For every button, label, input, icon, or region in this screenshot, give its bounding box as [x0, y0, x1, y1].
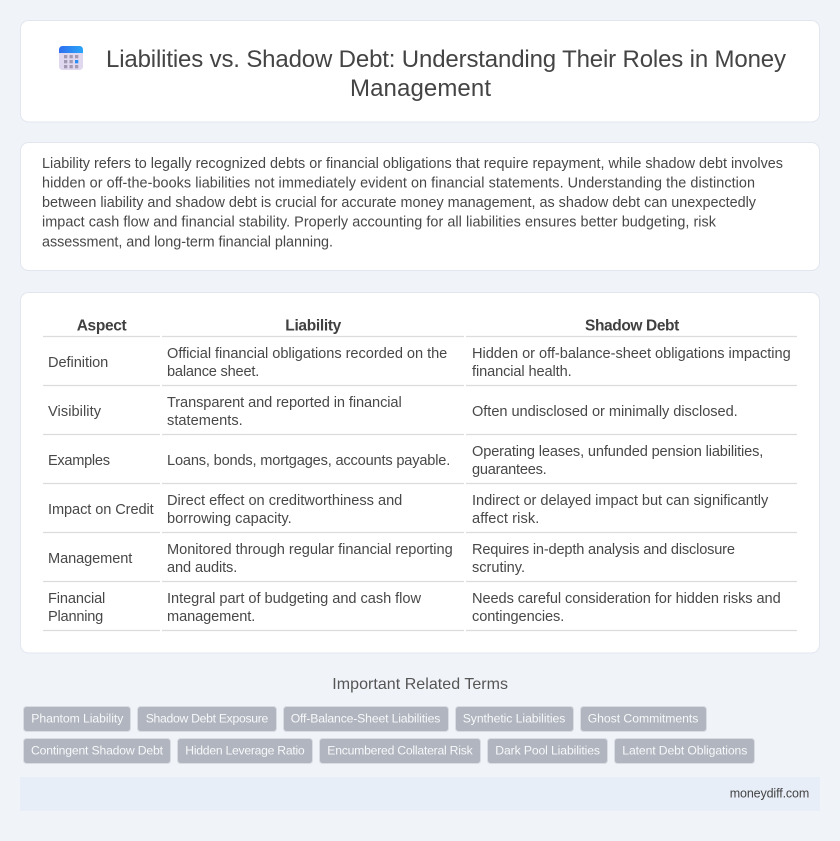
table header: Aspect [77, 318, 127, 334]
title: Liabilities vs. Shadow Debt: Understanding Their Roles in Money [106, 46, 786, 73]
tag: Hidden Leverage Ratio [185, 744, 305, 758]
tag: Off-Balance-Sheet Liabilities [291, 712, 440, 726]
row: management: Management [48, 551, 132, 567]
row: financial planning: Planning [48, 609, 103, 625]
row: management: Requires in-depth analysis and disclosure [472, 542, 735, 558]
tag [614, 738, 754, 764]
tag [24, 738, 170, 764]
row: definition: Official financial obligations recorded on the [167, 346, 447, 362]
tag: Latent Debt Obligations [622, 744, 747, 758]
tag [320, 738, 480, 764]
row: definition [48, 346, 791, 380]
row: visibility: Often undisclosed or minimally disclosed. [472, 404, 738, 420]
text block: summary [42, 156, 783, 250]
panel: header [20, 20, 820, 122]
row: impact on credit: borrowing capacity. [167, 511, 292, 527]
row: management: and audits. [167, 560, 237, 576]
tag [456, 706, 574, 732]
row: financial planning: contingencies. [472, 609, 564, 625]
tag [178, 738, 312, 764]
text block: summary: Liability refers to legally recognized debts or financial obligations that require repayment, while shadow debt involves [42, 156, 783, 172]
row: visibility [48, 395, 738, 429]
row: impact on credit: affect risk. [472, 511, 539, 527]
row: visibility: Transparent and reported in financial [167, 395, 402, 411]
row: management: scrutiny. [472, 560, 525, 576]
row: definition: Definition [48, 355, 108, 371]
icon: calendar [59, 46, 83, 70]
tag [580, 706, 706, 732]
title [106, 46, 786, 102]
panel: comparison table [20, 292, 820, 653]
footer [20, 777, 820, 811]
text block: summary: between liability and shadow debt is crucial for accurate money management, as shadow debt can unexpectedly [42, 195, 757, 211]
tag: Encumbered Collateral Risk [327, 744, 474, 758]
row: financial planning: management. [167, 609, 255, 625]
tag [24, 706, 130, 732]
row: visibility: Visibility [48, 404, 102, 420]
row: examples [48, 444, 763, 478]
table header [77, 318, 679, 334]
row: financial planning: Integral part of budgeting and cash flow [167, 591, 421, 607]
row: definition: balance sheet. [167, 364, 259, 380]
tag [138, 706, 276, 732]
tag: Contingent Shadow Debt [31, 744, 164, 758]
row: visibility: statements. [167, 413, 243, 429]
row: financial planning [48, 591, 781, 625]
tag [488, 738, 608, 764]
row: impact on credit: Indirect or delayed impact but can significantly [472, 493, 769, 509]
row: definition: financial health. [472, 364, 572, 380]
row: financial planning: Financial [48, 591, 105, 607]
tag: Dark Pool Liabilities [495, 744, 600, 758]
footer: moneydiff.com [730, 787, 809, 801]
text block: summary: impact cash flow and financial stability. Properly accounting for all liabilities ensures better budgeting, risk [42, 214, 717, 230]
row: examples: Operating leases, unfunded pension liabilities, [472, 444, 763, 460]
row: financial planning: Needs careful consideration for hidden risks and [472, 591, 781, 607]
tag: Shadow Debt Exposure [146, 712, 269, 726]
title: Management [350, 75, 491, 102]
row: definition: Hidden or off-balance-sheet obligations impacting [472, 346, 791, 362]
tag [284, 706, 448, 732]
row: impact on credit [48, 493, 769, 527]
tag: Synthetic Liabilities [463, 712, 565, 726]
heading: related terms: Important Related Terms [332, 676, 508, 693]
row: examples: Examples [48, 453, 110, 469]
tag: Phantom Liability [31, 712, 124, 726]
row: examples: guarantees. [472, 462, 547, 478]
row: examples: Loans, bonds, mortgages, accounts payable. [167, 453, 450, 469]
row: management: Monitored through regular financial reporting [167, 542, 453, 558]
tag: Ghost Commitments [588, 712, 698, 726]
table header: Shadow Debt [585, 318, 679, 334]
panel: related term tags [24, 706, 754, 764]
table header: Liability [285, 318, 342, 334]
panel: summary text [20, 142, 820, 270]
row: impact on credit: Direct effect on creditworthiness and [167, 493, 402, 509]
row: management [48, 542, 735, 576]
text block: summary: hidden or off-the-books liabilities not immediately evident on financial statements. Understanding the distinction [42, 176, 755, 192]
row: impact on credit: Impact on Credit [48, 502, 154, 518]
text block: summary: assessment, and long-term financial planning. [42, 234, 333, 250]
